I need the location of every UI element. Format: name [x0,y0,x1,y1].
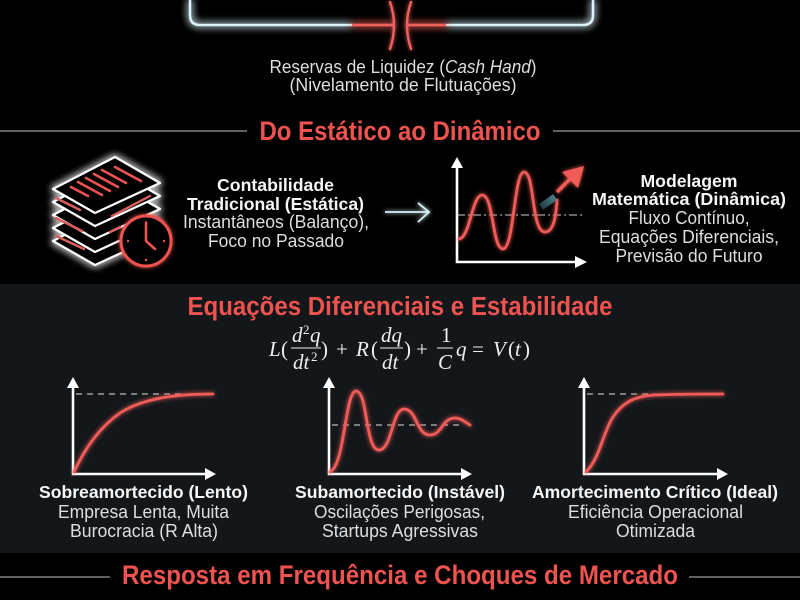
heading: differential equations: Equações Diferenciais e Estabilidade [188,293,612,321]
chart: overdamped [67,377,216,480]
formula [268,322,530,374]
chart: critical damping [578,377,728,480]
chart: underdamped [323,377,472,480]
formula: L [268,337,281,361]
text: underdamped: Startups Agressivas [322,521,478,541]
text: traditional accounting: Contabilidade [217,175,334,195]
text: traditional accounting: Tradicional (Estática) [187,194,364,214]
formula: + [416,337,428,361]
caption: liquidity reserves: Reservas de Liquidez (Cash Hand) [270,57,536,77]
text: mathematical modelling: Previsão do Futuro [616,246,762,266]
formula: V [493,337,508,361]
formula: ) [321,337,328,361]
formula: q [456,337,467,361]
icon: document stack with clock [53,157,171,266]
caption: liquidity reserves: (Nivelamento de Flutuações) [290,75,516,95]
text: critical damping: Eficiência Operacional [568,502,743,522]
formula: dq [381,323,402,347]
formula: dt [293,350,310,374]
formula: t [515,337,522,361]
arrow: static to dynamic [385,203,429,222]
circuit wire with capacitor [190,0,593,49]
formula: d [292,323,303,347]
text: overdamped [39,482,248,541]
text: critical damping: Amortecimento Crítico (Ideal) [532,482,778,502]
text: overdamped: Empresa Lenta, Muita [58,502,230,522]
formula: 1 [441,323,452,347]
text: traditional accounting: Foco no Passado [208,231,344,251]
chart: dynamic modelling [451,157,587,268]
text: mathematical modelling: Modelagem [640,171,738,191]
formula: C [438,350,453,374]
formula: q [310,323,321,347]
text: underdamped: Oscilações Perigosas, [314,502,485,522]
text: mathematical modelling: Equações Diferenciais, [599,227,779,247]
text: traditional accounting: Instantâneos (Balanço), [183,212,369,232]
text: underdamped: Subamortecido (Instável) [295,482,505,502]
formula: 2 [311,349,318,364]
formula: ) [523,337,530,361]
formula: ) [404,337,411,361]
text: overdamped: Burocracia (R Alta) [70,521,218,541]
formula: = [472,337,484,361]
formula: + [336,337,348,361]
caption: liquidity reserves [270,57,536,95]
text: traditional accounting [183,175,369,251]
heading: static to dynamic: Do Estático ao Dinâmico [260,116,540,146]
formula: ( [508,337,515,361]
formula: 2 [303,322,310,337]
text: underdamped [295,482,505,541]
text: overdamped: Sobreamortecido (Lento) [39,482,248,502]
formula: dt [382,350,400,374]
text: mathematical modelling: Fluxo Contínuo, [628,208,750,228]
text: critical damping [532,482,778,541]
text: mathematical modelling [592,171,786,266]
formula: ( [281,337,288,361]
heading: frequency response: Resposta em Frequência e Choques de Mercado [122,560,678,590]
formula: R [355,337,369,361]
panel: differential equations [0,284,800,553]
text: critical damping: Otimizada [616,521,696,541]
formula: ( [371,337,378,361]
text: mathematical modelling: Matemática (Dinâmica) [592,189,786,209]
